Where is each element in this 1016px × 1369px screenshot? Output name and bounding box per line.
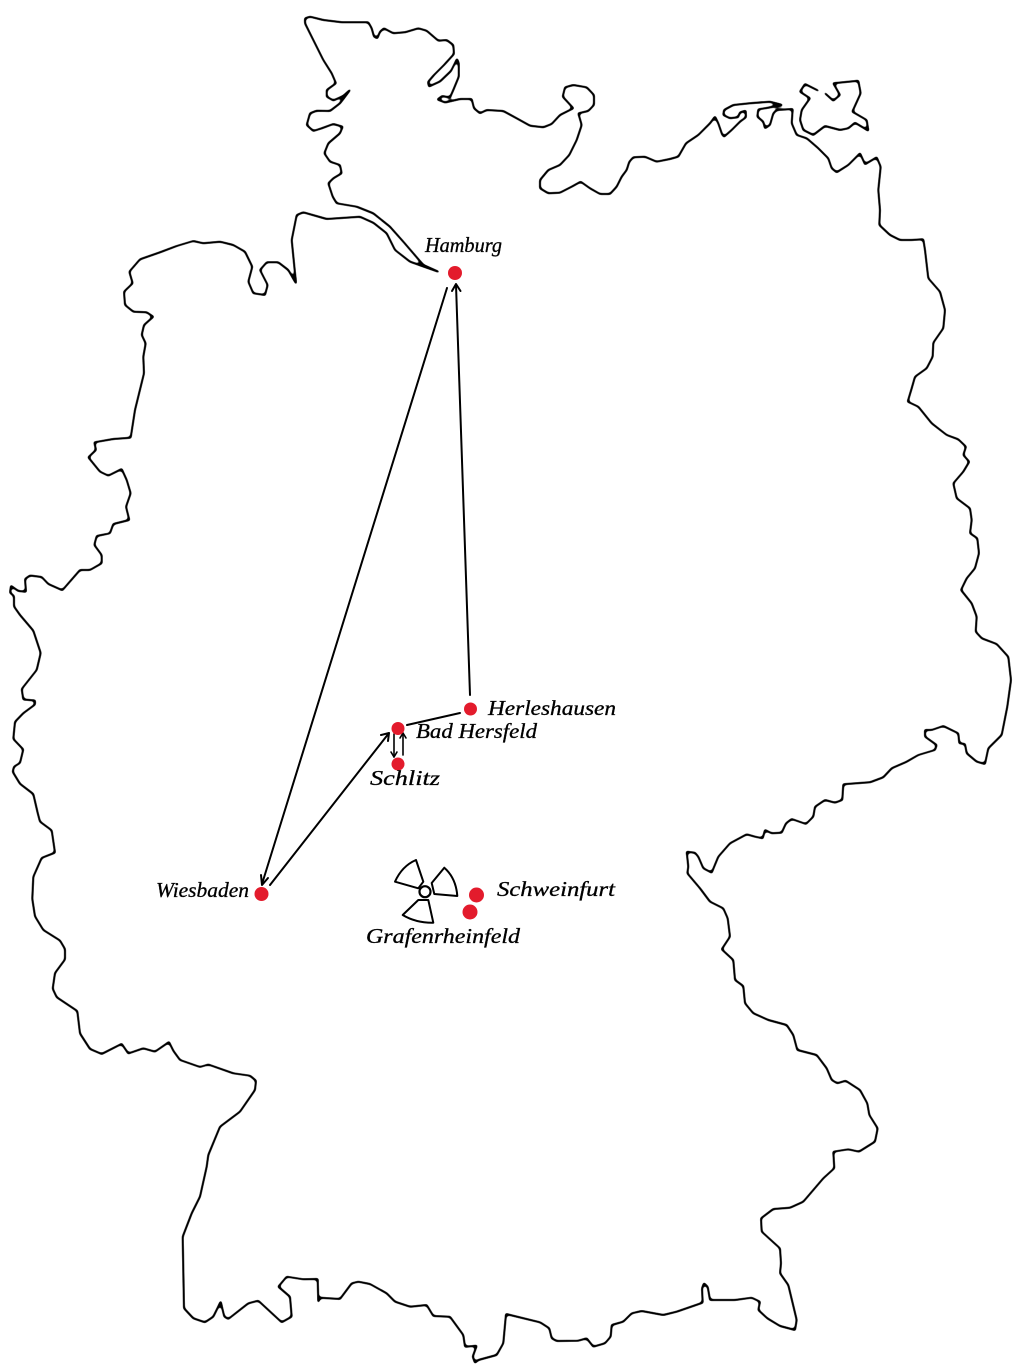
marker: Bad Hersfeld xyxy=(392,722,404,735)
marker: Wiesbaden xyxy=(254,887,268,901)
arrow: Wiesbaden to Bad Hersfeld xyxy=(270,733,389,885)
label: Herleshausen: Herleshausen xyxy=(487,696,616,720)
label: Bad Hersfeld: Bad Hersfeld xyxy=(416,719,538,743)
marker: Hamburg xyxy=(448,266,462,280)
icon: radiation symbol xyxy=(395,860,457,923)
marker: Schweinfurt xyxy=(469,888,484,902)
label: Hamburg: Hamburg xyxy=(424,233,502,257)
arrow: Hamburg to Wiesbaden xyxy=(261,288,447,885)
marker: Schlitz xyxy=(392,758,404,770)
arrow: Schlitz to Bad Hersfeld xyxy=(400,733,406,755)
label: Wiesbaden: Wiesbaden xyxy=(156,878,249,902)
line: Herleshausen to Bad Hersfeld xyxy=(407,713,460,725)
label: Schweinfurt: Schweinfurt xyxy=(497,877,616,901)
marker: Grafenrheinfeld xyxy=(462,904,478,920)
label: Grafenrheinfeld: Grafenrheinfeld xyxy=(366,924,521,948)
marker: Herleshausen xyxy=(464,702,477,716)
arrow: Herleshausen to Hamburg xyxy=(452,284,470,695)
label: Schlitz: Schlitz xyxy=(370,766,440,790)
arrow: Bad Hersfeld to Schlitz xyxy=(391,734,397,757)
